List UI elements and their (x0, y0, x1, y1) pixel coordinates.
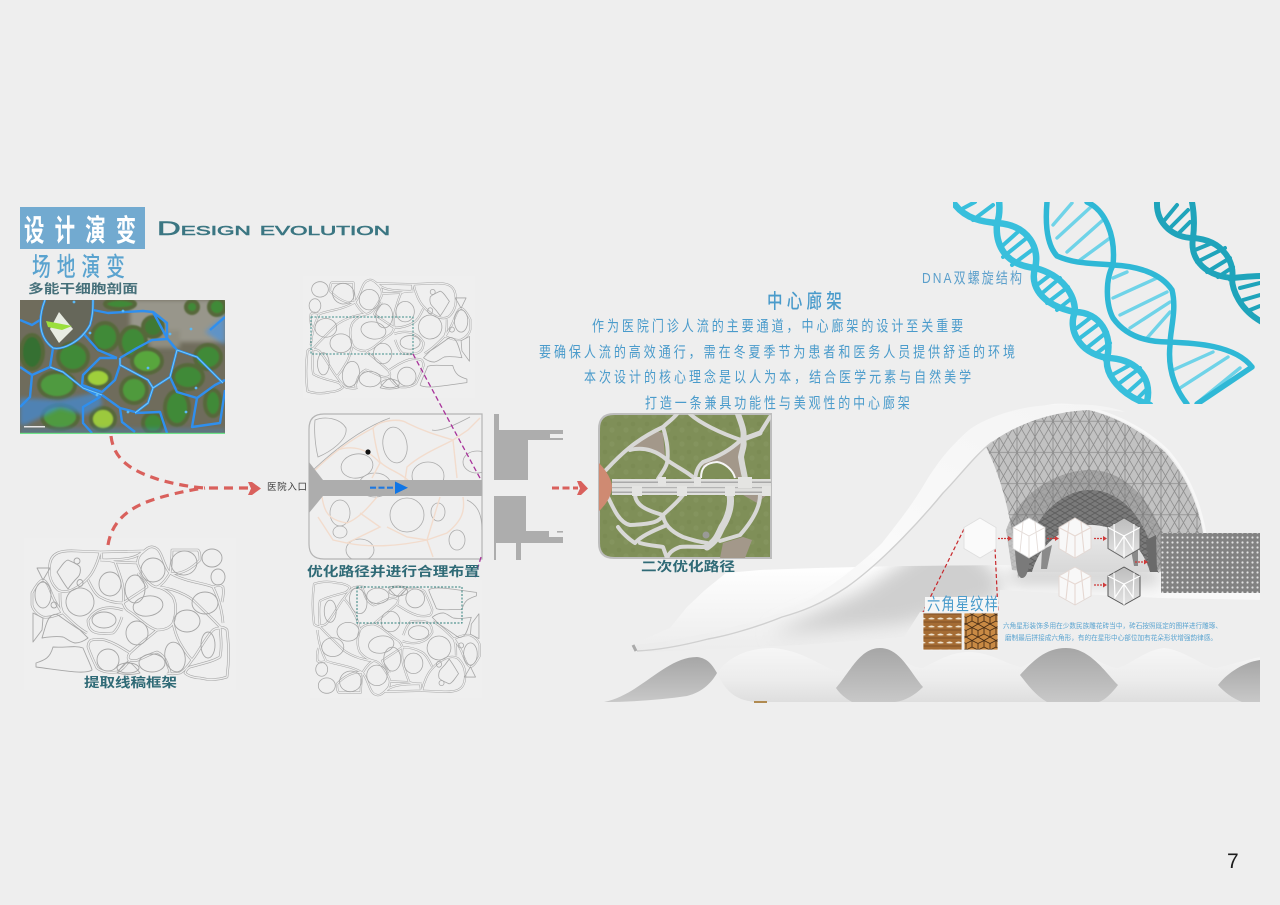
black node (365, 449, 371, 455)
label: 六角星纹样: 六角星纹样 (927, 596, 998, 614)
hexagon step 5 (1059, 567, 1091, 605)
site plan: secondary path optimisation (598, 414, 771, 558)
entrance semicircle (599, 463, 612, 511)
label: 二次优化路径: 二次优化路径 (641, 559, 735, 574)
vault white outer rim (1000, 405, 1207, 548)
wave lens: second (836, 648, 923, 702)
pavilion: hexagonal mesh vault (985, 405, 1207, 578)
text line 1: 作为医院门诊人流的主要通道，中心廊架的设计至关重要 (592, 317, 963, 334)
hexagram description text (1003, 621, 1222, 642)
helix: left (953, 200, 1150, 405)
helix: right (1157, 202, 1262, 322)
hexagon step 6 (1108, 567, 1140, 605)
dashed arrow: cell image to framework (108, 436, 248, 545)
arch path (701, 462, 735, 478)
title block: 设计演变 (20, 207, 145, 249)
caption: 多能干细胞剖面: 多能干细胞剖面 (28, 281, 138, 296)
pavilion: floor with torn edge (690, 565, 1260, 636)
central corridor title and description (539, 290, 1015, 411)
label: DNA双螺旋结构: DNA双螺旋结构 (922, 270, 1022, 286)
helix: center (1046, 202, 1252, 404)
central corridor (309, 462, 482, 513)
text line 3: 本次设计的核心理念是以人为本，结合医学元素与自然美学 (584, 368, 971, 385)
heading: Design evolution: Design evolution (157, 219, 390, 240)
title block: 设计演变: 设计演变 (24, 214, 136, 248)
diamond marker in cell (46, 312, 73, 343)
extracted line framework (24, 538, 236, 690)
walking paths (606, 414, 770, 558)
wave lens: right (1218, 660, 1260, 702)
white wave surfaces (604, 648, 1260, 703)
plazas (632, 430, 767, 558)
blue direction arrow (370, 482, 408, 494)
magenta dashed guide lines (413, 354, 481, 622)
vault legs (1015, 530, 1031, 578)
red arrow to site plan (552, 481, 588, 495)
hexagram description text: 磨制最后拼接成六角形，有的在星形中心部位加有花朵形状增强韵律感。 (1005, 633, 1217, 642)
text line 4: 打造一条兼具功能性与美观性的中心廊架 (645, 394, 910, 411)
small red step arrows (998, 536, 1148, 588)
brick pattern samples (923, 613, 998, 650)
vault inner opening (1020, 490, 1158, 572)
hexagon step 3 (1059, 518, 1091, 558)
pavilion: white curved ribbon (633, 404, 1125, 651)
DNA double helix graphic (953, 200, 1262, 405)
text line 2: 要确保人流的高效通行，需在冬夏季节为患者和医务人员提供舒适的环境 (539, 343, 1015, 360)
wave lens: left (604, 657, 717, 702)
arrowhead: red (248, 482, 261, 495)
subheading: 场地演变: 场地演变 (32, 252, 125, 282)
optimised path plan (309, 414, 491, 561)
hexagon step 2 (1013, 518, 1045, 558)
stem cell section image (20, 299, 225, 434)
building footprint (494, 414, 563, 560)
selection rectangle (311, 317, 413, 354)
label: 优化路径并进行合理布置: 优化路径并进行合理布置 (307, 564, 480, 579)
red dashed zoom lines (923, 529, 998, 612)
selection rectangle (357, 587, 462, 623)
hexagon step 1 (964, 518, 996, 558)
corridor bands (612, 479, 771, 495)
title: 中心廊架: 中心廊架 (767, 290, 842, 312)
hexagon step 4 (1108, 518, 1140, 558)
page number: 7 (1227, 850, 1239, 873)
label: 医院入口: 医院入口 (267, 481, 307, 493)
wave lens: third (1020, 648, 1118, 702)
bottom framework drawing with selection (310, 580, 482, 698)
pattern swatch (1161, 533, 1260, 593)
hexagram description text: 六角星形装饰多用在少数民族雕花砖当中，砖石按照既定的图样进行雕琢、 (1003, 621, 1222, 630)
label: 提取线稿框架: 提取线稿框架 (84, 675, 177, 690)
top framework drawing with selection (303, 276, 475, 398)
